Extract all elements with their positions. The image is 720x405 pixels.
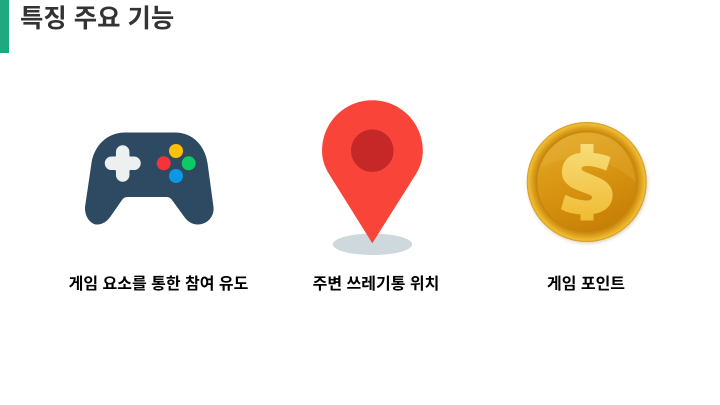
coin face [537, 132, 636, 232]
coin highlight [540, 132, 636, 182]
icon: map pin [322, 100, 423, 255]
icon: gold coin [527, 122, 648, 244]
face buttons [157, 144, 196, 183]
coin rim [527, 122, 647, 242]
coin drop shadow [528, 124, 648, 244]
label: game elements: 게임 요소를 통한 참여 유도 [69, 275, 249, 293]
d-pad [112, 152, 134, 175]
accent bar [0, 0, 9, 53]
pin shadow [333, 234, 412, 255]
label: game points: 게임 포인트 [547, 275, 625, 293]
label: nearby trash location: 주변 쓰레기통 위치 [313, 275, 439, 293]
pin centre [351, 129, 394, 172]
icon: game controller [85, 132, 214, 224]
dollar sign [562, 144, 612, 220]
title: 특징 주요 기능 [20, 5, 174, 33]
pin body [322, 100, 423, 243]
controller body [85, 132, 214, 224]
